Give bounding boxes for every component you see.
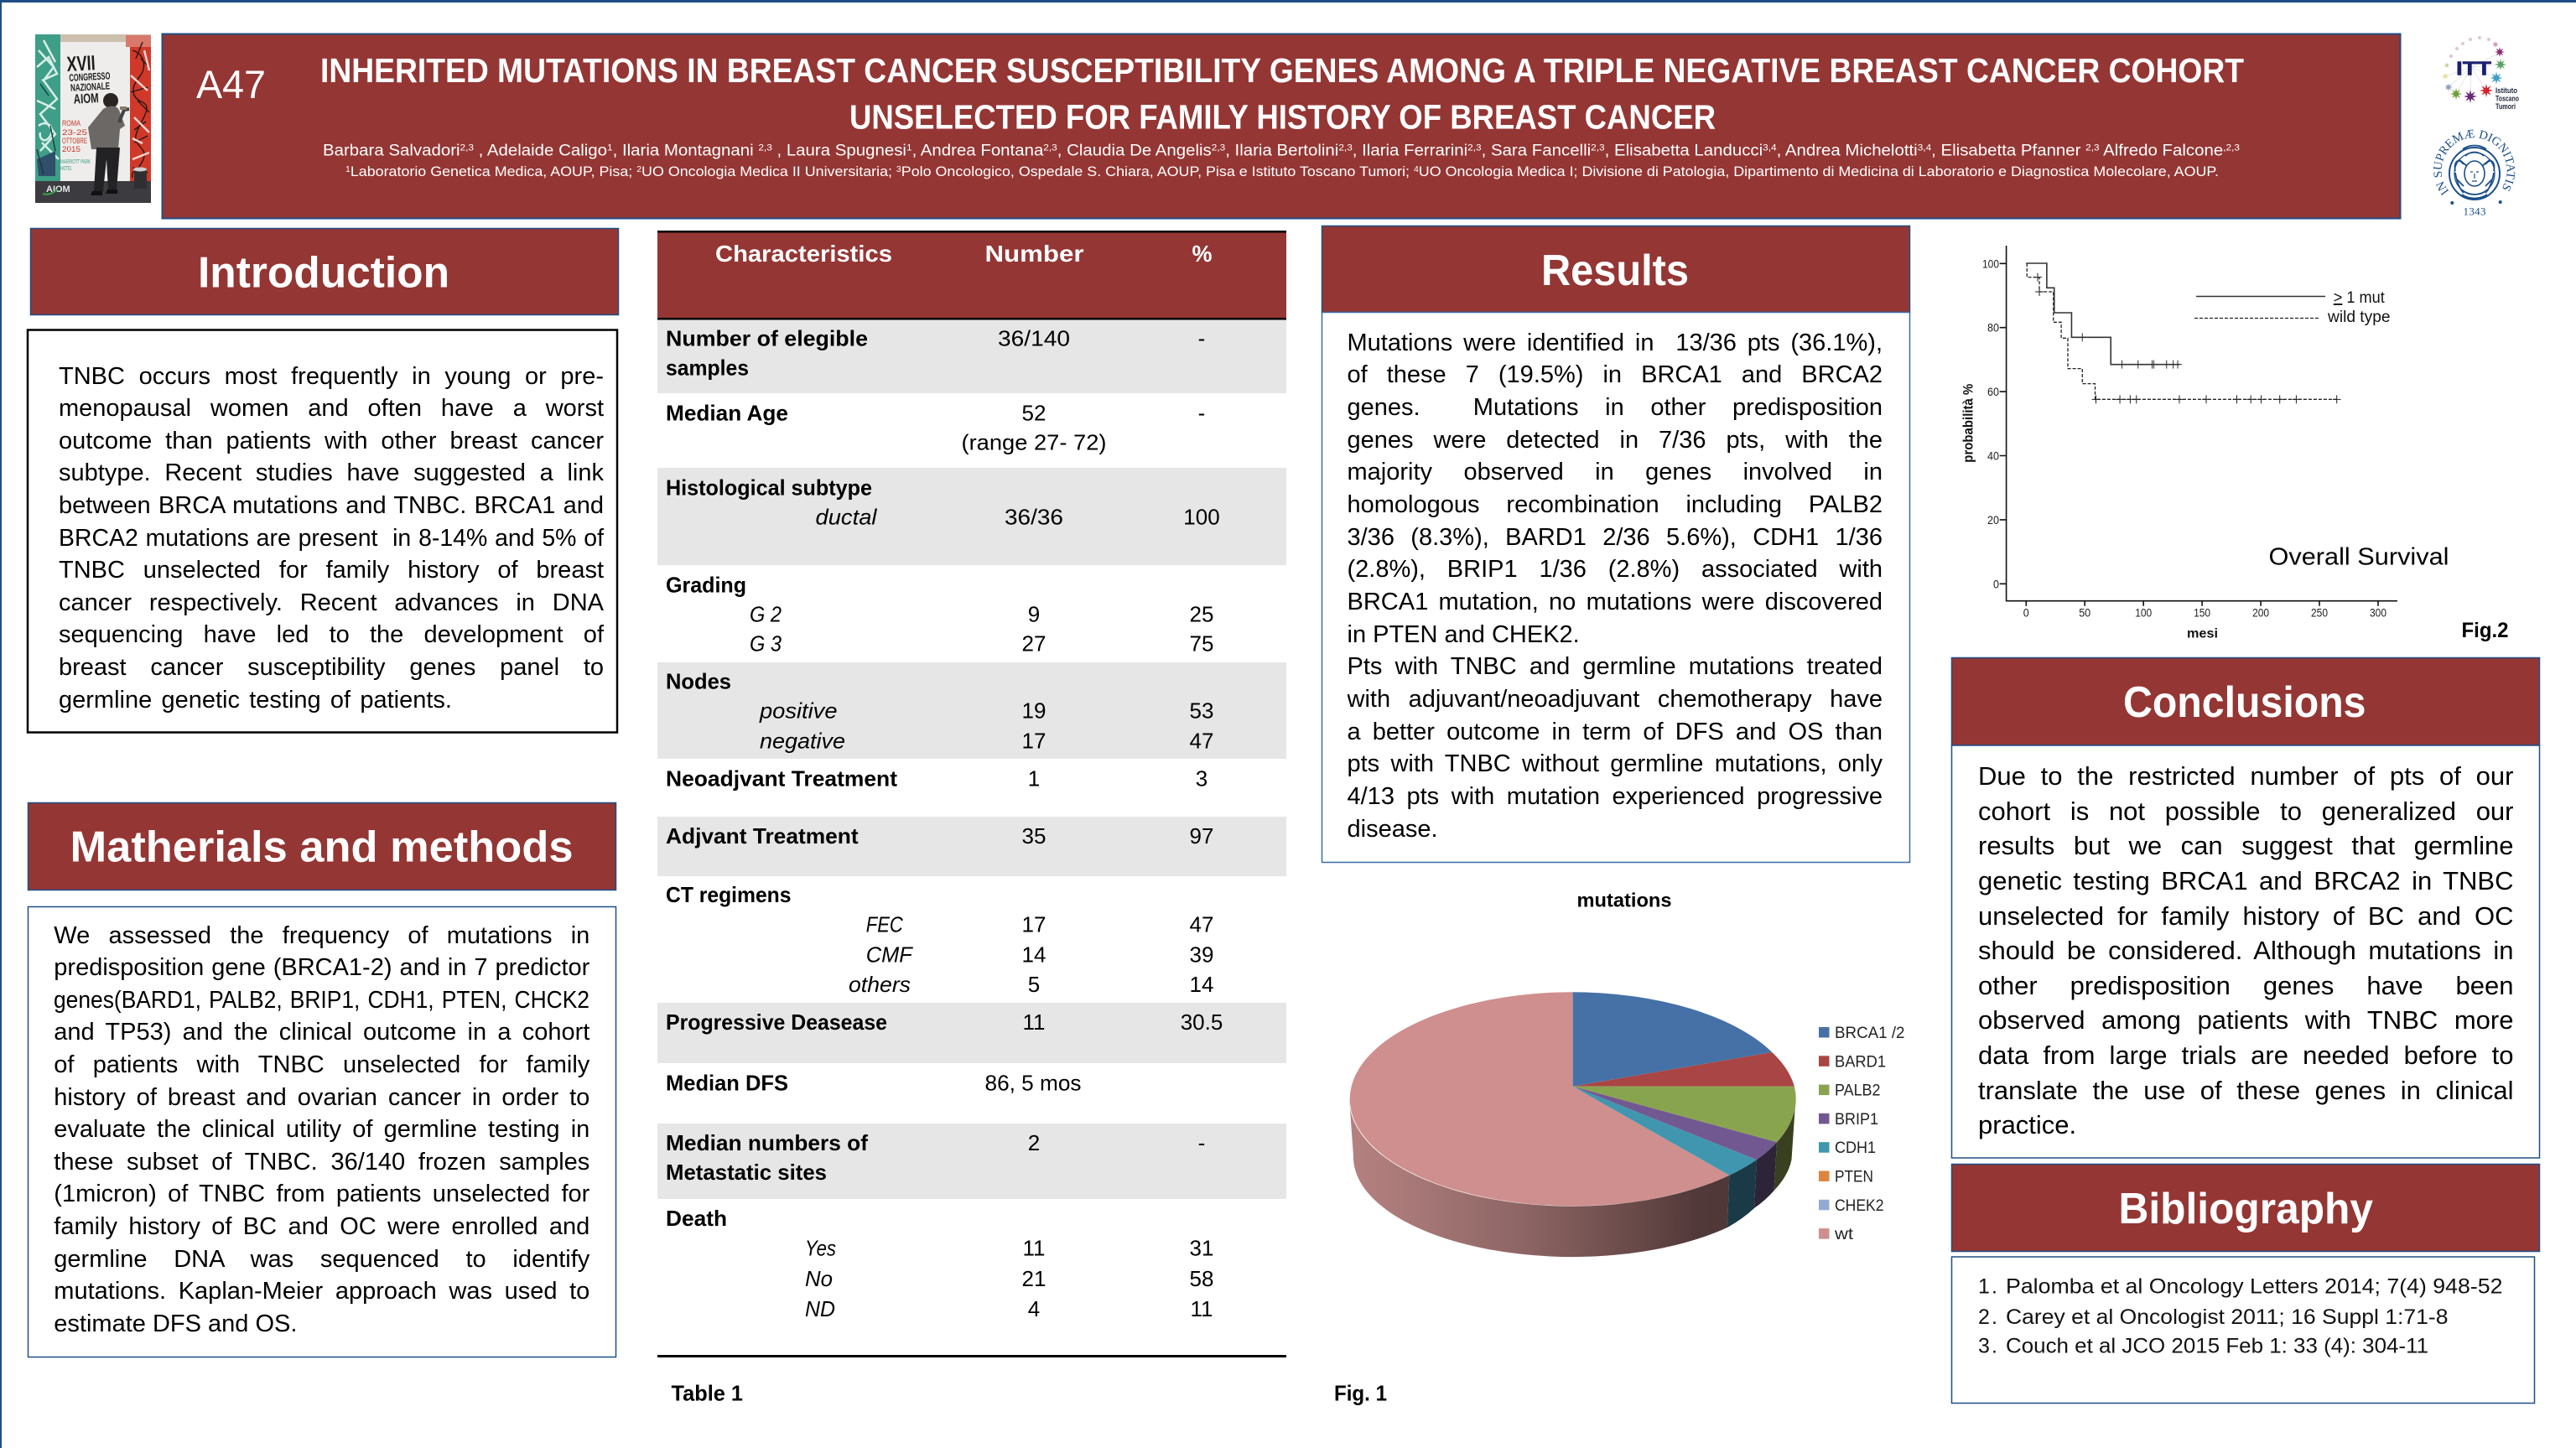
row: grading: 27 (1022, 631, 1046, 657)
logo: University of Pisa seal: IN SUPREMÆ DIGNITATIS (2433, 129, 2516, 196)
row: nodes: positive (759, 698, 837, 724)
row: number of elegible samples: 36/140 (998, 326, 1070, 351)
table header (657, 231, 1286, 320)
affiliations: Polo Oncologico, Ospedale S. Chiara, AOUP, Pisa e Istituto Toscano Tumori; (901, 163, 1414, 179)
text block: results body: genes. Mutations in other predisposition (1347, 394, 1883, 421)
text block: references: 1. (1978, 1275, 1997, 1299)
text block: introduction body: BRCA2 mutations are present in 8-14% and 5% of (59, 525, 604, 552)
title: INHERITED MUTATIONS IN BREAST CANCER SUSCEPTIBILITY GENES AMONG A TRIPLE NEGATIVE BREAST CANCER COHORT (320, 51, 2244, 90)
logo: Istituto Toscano Tumori: ITT (2456, 57, 2491, 79)
row: adjuvant treatment: 97 (1190, 823, 1213, 849)
row: grading: Grading (666, 573, 746, 598)
text block: results body (1322, 312, 1910, 862)
text block: methods body: germline DNA was sequenced to identify (54, 1246, 589, 1273)
panel: materials and methods (29, 803, 615, 1357)
authors: 2,3 (1338, 143, 1353, 153)
row: CT regimens (666, 882, 1213, 997)
text block: results body: with adjuvant/neoadjuvant chemotherapy have (1347, 686, 1883, 713)
text block: references: Couch et al JCO 2015 Feb 1: 33 (4): 304-11 (2006, 1335, 2428, 1358)
row: nodes: 19 (1022, 698, 1046, 724)
chart label: Overall Survival: Overall Survival (2269, 543, 2449, 570)
row: neoadjuvant treatment: 1 (1028, 766, 1040, 791)
text block: methods body: family history of BC and OC were enrolled and (54, 1213, 589, 1240)
text block: conclusions body: results but we can suggest that germline (1978, 831, 2514, 860)
row: death: Yes (805, 1236, 836, 1261)
poster text: congress title: XVII (66, 51, 96, 76)
x axis labels: 250 (2311, 606, 2328, 620)
heading: Bibliography: Bibliography (2118, 1185, 2373, 1233)
text block: results body: Mutations were identified in 13/36 pts (36.1%), (1347, 330, 1883, 356)
x axis labels (2023, 606, 2386, 620)
authors: 2,3 (1212, 143, 1225, 153)
chart legend: wild type (2327, 309, 2390, 326)
y axis labels: 0 (1993, 577, 1999, 590)
authors: 1 (906, 143, 912, 153)
row: death: 31 (1190, 1236, 1213, 1261)
text block: results body: Pts with TNBC and germline mutations treated (1347, 653, 1883, 680)
row: nodes: 53 (1190, 698, 1213, 724)
header banner (163, 34, 2400, 218)
row: grading: 9 (1028, 602, 1040, 627)
row: death: No (805, 1266, 833, 1291)
row: median number of metastatic sites: 2 (1028, 1130, 1040, 1155)
affiliations: Laboratorio Genetica Medica, AOUP, Pisa; (351, 163, 636, 179)
x axis labels: 150 (2194, 606, 2210, 620)
text block: conclusions body: translate the use of these genes in clinical (1978, 1076, 2514, 1105)
text block: results body: 4/13 pts with mutation experienced progressive (1347, 783, 1883, 810)
authors: , Claudia De Angelis (1057, 143, 1212, 159)
row: nodes: 17 (1022, 729, 1046, 754)
pie legend: BRCA1 /2 (1835, 1025, 1905, 1042)
text block: methods body: and TP53) and the clinical outcome in a cohort (54, 1019, 589, 1046)
poster text: date and place (60, 119, 91, 172)
text block: results body: a better outcome in term of DFS and OS than (1347, 719, 1883, 745)
text block: conclusions body: Due to the restricted number of pts of our (1978, 761, 2514, 791)
row: CT regimens: FEC (866, 912, 903, 937)
poster text: congress title: CONGRESSO (69, 70, 111, 84)
text block: conclusions body: cohort is not possible to generalized our (1978, 797, 2514, 826)
text block: methods body: genes(BARD1, PALB2, BRIP1, CDH1, PTEN, CHCK2 (54, 987, 589, 1014)
pie legend: PTEN (1835, 1169, 1873, 1186)
authors: Alfredo Falcone (2100, 143, 2223, 159)
x axis labels: 200 (2252, 606, 2269, 620)
row: death: 4 (1028, 1296, 1040, 1321)
chart: mutations pie (1349, 890, 1905, 1257)
text block: introduction body: TNBC occurs most frequently in young or pre- (59, 363, 604, 390)
row: median DFS: Median DFS (666, 1071, 788, 1096)
text block: introduction body: sequencing have led to the development of (59, 621, 604, 648)
row: grading (666, 573, 1213, 657)
row: CT regimens: CT regimens (666, 882, 792, 907)
poster text: date and place: ROMA (62, 119, 81, 128)
panel: introduction (28, 228, 619, 733)
authors: , Elisabetta Pfanner (1931, 143, 2085, 159)
row: number of elegible samples (666, 326, 1205, 381)
abstract code: A47 (196, 62, 266, 106)
title (320, 51, 2244, 136)
row: nodes: Nodes (666, 669, 731, 694)
authors: 2,3 (1467, 143, 1482, 153)
row: progressive disease: 30.5 (1181, 1009, 1223, 1035)
poster text: congress title: NAZIONALE (70, 80, 110, 94)
text block: introduction body: cancer respectively. Recent advances in DNA (59, 589, 604, 616)
text block: references: Palomba et al Oncology Letters 2014; 7(4) 948-52 (2006, 1275, 2502, 1299)
text block: results body: homologous recombination including PALB2 (1347, 491, 1883, 518)
x axis labels: 0 (2023, 606, 2029, 620)
text block: introduction body: germline genetic testing of patients. (59, 687, 452, 714)
authors: , Laura Spugnesi (772, 143, 906, 159)
authors: , Adelaide Caligo (474, 143, 607, 159)
authors: 1 (607, 143, 613, 153)
text block: results body: disease. (1347, 816, 1438, 843)
row: CT regimens: 17 (1022, 912, 1046, 937)
text block: results body: pts with TNBC without germline mutations, only (1347, 750, 1883, 777)
text block: introduction body: between BRCA mutations and TNBC. BRCA1 and (59, 492, 604, 519)
row: median age: (range 27- 72) (961, 430, 1107, 455)
heading: Results (1322, 226, 1910, 312)
pie legend (1819, 1025, 1905, 1243)
pie legend: BARD1 (1835, 1053, 1886, 1071)
heading: Bibliography (1952, 1164, 2539, 1251)
row: progressive disease: Progressive Deasease (666, 1009, 887, 1035)
row: death (666, 1206, 1213, 1321)
row: neoadjuvant treatment: Neoadjvant Treatment (666, 766, 897, 791)
table 1: patient characteristics (657, 231, 1286, 1357)
chart legend (2194, 289, 2390, 326)
y axis labels: 100 (1982, 257, 1999, 270)
authors: , Elisabetta Landucci (1605, 143, 1763, 159)
authors: , Andrea Michelotti (1777, 143, 1918, 159)
text block: conclusions body: observed among patients with TNBC more (1978, 1005, 2514, 1035)
authors: 3,4 (1763, 143, 1777, 153)
x axis labels: 300 (2370, 606, 2386, 620)
text block: references: 2. (1978, 1305, 1997, 1329)
text block: methods body: estimate DFS and OS. (54, 1310, 297, 1337)
chart title: mutations (1576, 890, 1672, 911)
row: grading: G 3 (750, 631, 782, 657)
row: CT regimens: 14 (1022, 942, 1046, 968)
pie legend: BRIP1 (1835, 1111, 1878, 1129)
poster text: congress title (67, 55, 111, 104)
row: median age: - (1198, 401, 1205, 426)
panel: results (1322, 226, 1910, 862)
text block: methods body: We assessed the frequency of mutations in (54, 922, 589, 949)
row: median age: 52 (1022, 401, 1046, 426)
row: adjuvant treatment: Adjvant Treatment (666, 823, 859, 849)
text block: references: 3. (1978, 1335, 1997, 1358)
row: grading: 25 (1190, 602, 1213, 627)
text block: conclusions body: data from large trials are needed before to (1978, 1041, 2514, 1070)
heading: Introduction (30, 228, 619, 315)
axes (2000, 246, 2397, 606)
text block: introduction body: TNBC unselected for family history of breast (59, 557, 604, 584)
text block: results body: genes were detected in 7/36 pts, with the (1347, 427, 1883, 454)
heading: Matherials and methods: Matherials and methods (70, 823, 574, 872)
row: CT regimens: others (849, 972, 911, 997)
poster text: date and place: MARRIOTT PARK (60, 159, 91, 165)
row: progressive disease (666, 1009, 1223, 1035)
text block: methods body: history of breast and ovarian cancer in order to (54, 1084, 589, 1111)
authors: , Ilaria Bertolini (1225, 143, 1338, 159)
y axis labels: 20 (1987, 513, 1999, 527)
authors: , Ilaria Montagnani (613, 143, 758, 159)
authors: ,2,3 (2223, 143, 2240, 153)
authors: , Sara Fancelli (1482, 143, 1591, 159)
text block: conclusions body: should be considered. Although mutations in (1978, 936, 2514, 965)
row: median number of metastatic sites: Median numbers of (666, 1130, 868, 1155)
text block: results body: BRCA1 mutation, no mutations were discovered (1347, 589, 1883, 615)
row: grading: G 2 (750, 602, 782, 627)
row: median age: Median Age (666, 401, 788, 426)
text block: introduction body: outcome than patients with other breast cancer (59, 428, 604, 454)
row: median number of metastatic sites: Metastatic sites (666, 1160, 827, 1185)
row: histological subtype: 36/36 (1005, 505, 1063, 530)
caption: Table 1: Table 1 (671, 1381, 743, 1406)
row: nodes: negative (760, 729, 845, 754)
row: median age (666, 401, 1205, 455)
heading: Introduction: Introduction (198, 248, 449, 297)
row: CT regimens: 14 (1190, 972, 1213, 997)
poster text: congress title: AIOM (73, 91, 99, 107)
row: progressive disease: 11 (1023, 1009, 1045, 1035)
survival curve: one or more mutations (2026, 263, 2182, 369)
authors: 2,3 (758, 143, 772, 153)
text block: methods body: of patients with TNBC unselected for family (54, 1051, 589, 1078)
panel: conclusions (1952, 657, 2539, 1158)
row: neoadjuvant treatment: 3 (1196, 766, 1208, 791)
row: number of elegible samples: Number of elegible (666, 326, 868, 351)
poster text: date and place: 23-25 (62, 128, 87, 138)
text block: results body: (2.8%), BRIP1 1/36 (2.8%) associated with (1347, 556, 1883, 583)
row: CT regimens: 5 (1028, 972, 1040, 997)
authors: 2,3 (1591, 143, 1605, 153)
pie legend: CDH1 (1835, 1139, 1876, 1157)
affiliations: 1 (345, 165, 351, 174)
text block: introduction body: subtype. Recent studies have suggested a link (59, 459, 604, 486)
row: CT regimens: 39 (1190, 942, 1213, 968)
text block: results body: 3/36 (8.3%), BARD1 2/36 5.6%), CDH1 1/36 (1347, 524, 1883, 551)
table header: % (1192, 241, 1213, 267)
row: CT regimens: CMF (866, 942, 914, 968)
row: death: ND (805, 1296, 835, 1321)
text block: conclusions body: other predisposition genes have been (1978, 971, 2514, 1000)
text block: methods body (29, 907, 615, 1357)
chart legend: > 1 mut (2334, 289, 2385, 307)
text block: references (1952, 1257, 2534, 1404)
y axis labels: 80 (1987, 321, 1999, 335)
authors: 2,3 (1043, 143, 1057, 153)
row: adjuvant treatment (666, 823, 1213, 849)
text block: results body: in PTEN and CHEK2. (1347, 621, 1580, 648)
pie legend: PALB2 (1835, 1082, 1880, 1100)
row: median number of metastatic sites (666, 1130, 1205, 1185)
logo: Istituto Toscano Tumori: Tumori (2496, 102, 2516, 112)
caption: Fig.2: Fig.2 (2462, 619, 2509, 642)
affiliations: UO Oncologia Medica I; Divisione di Patologia, Dipartimento di Medicina di Laboratorio e Diagnostica Molecolare, AOUP. (1419, 163, 2219, 179)
text block: results body: majority observed in genes involved in (1347, 459, 1883, 485)
authors: 3,4 (1918, 143, 1931, 153)
affiliations: UO Oncologia Medica II Universitaria; (641, 163, 896, 179)
row: neoadjuvant treatment (666, 766, 1208, 791)
authors: , Ilaria Ferrarini (1353, 143, 1467, 159)
text block: introduction body: breast cancer susceptibility genes panel to (59, 654, 604, 681)
logo: University of Pisa seal: 1343 (2464, 205, 2485, 218)
row: median DFS (666, 1071, 1082, 1096)
pie side wall (1349, 1098, 1795, 1257)
logo: Istituto Toscano Tumori (2442, 36, 2519, 112)
pie legend: CHEK2 (1835, 1197, 1883, 1215)
y axis labels: 40 (1987, 449, 1999, 463)
row: death: 58 (1190, 1266, 1213, 1291)
authors: Barbara Salvadori (323, 143, 450, 159)
y axis labels (1982, 257, 1999, 590)
panel: bibliography (1952, 1164, 2539, 1404)
row: nodes (666, 669, 1213, 754)
row: number of elegible samples: - (1198, 326, 1205, 351)
image: congress poster (35, 34, 151, 203)
x axis title: mesi (2187, 627, 2218, 641)
logo: Istituto Toscano Tumori: Istituto (2496, 86, 2517, 96)
text block: conclusions body: unselected for family history of BC and OC (1978, 901, 2514, 931)
affiliations: 3 (896, 165, 901, 174)
text block: conclusions body: genetic testing BRCA1 and BRCA2 in TNBC (1978, 866, 2514, 895)
row: median number of metastatic sites: - (1198, 1130, 1205, 1155)
text block: methods body: predisposition gene (BRCA1-2) and in 7 predictor (54, 954, 589, 981)
authors: , Andrea Fontana (912, 143, 1044, 159)
heading: Conclusions: Conclusions (2123, 678, 2366, 727)
text block: conclusions body (1952, 745, 2539, 1158)
x axis labels: 100 (2135, 606, 2152, 620)
caption: Fig. 1: Fig. 1 (1334, 1381, 1387, 1406)
text block: conclusions body: practice. (1978, 1110, 2076, 1139)
title: UNSELECTED FOR FAMILY HISTORY OF BREAST CANCER (849, 97, 1716, 136)
heading: Conclusions (1952, 657, 2539, 745)
affiliations: 2 (636, 165, 642, 174)
text block: introduction body (28, 330, 617, 733)
row: histological subtype: Histological subtype (666, 475, 872, 501)
text block: methods body: these subset of TNBC. 36/140 frozen samples (54, 1149, 589, 1176)
survival curve: wild type (2027, 263, 2341, 403)
affiliations: 4 (1414, 165, 1419, 174)
y axis title: probabilità % (1961, 384, 1976, 463)
row: death: 11 (1023, 1236, 1045, 1261)
authors: 2,3 (460, 143, 474, 153)
row: adjuvant treatment: 35 (1022, 823, 1046, 849)
row: death: 21 (1022, 1266, 1046, 1291)
poster figure: painter (88, 93, 147, 195)
text block: methods body: evaluate the clinical utility of germline testing in (54, 1116, 589, 1143)
poster text: date and place: OTTOBRE (62, 137, 87, 146)
authors: 2,3 (2085, 143, 2100, 153)
poster logo: AIOM: AIOM (46, 184, 70, 195)
row: death: 11 (1191, 1296, 1213, 1321)
row: histological subtype (666, 475, 1220, 530)
row: nodes: 47 (1190, 729, 1213, 754)
heading: Results: Results (1541, 247, 1689, 295)
row: grading: 75 (1190, 631, 1213, 657)
pie top wedges (1350, 992, 1796, 1206)
row: median DFS: 86, 5 mos (984, 1071, 1082, 1096)
row: CT regimens: 47 (1190, 912, 1213, 937)
poster text: date and place: 2015 (62, 145, 80, 154)
text block: references: Carey et al Oncologist 2011; 16 Suppl 1:71-8 (2006, 1305, 2449, 1329)
x axis labels: 50 (2079, 606, 2090, 620)
heading: Matherials and methods (29, 803, 615, 890)
chart: Kaplan-Meier overall survival (1961, 246, 2449, 641)
table row backgrounds (657, 319, 1286, 1199)
text block: methods body: (1micron) of TNBC from patients unselected for (54, 1181, 589, 1207)
y axis labels: 60 (1987, 385, 1999, 398)
text block: results body: of these 7 (19.5%) in BRCA1 and BRCA2 (1347, 361, 1883, 388)
logo: Istituto Toscano Tumori: Toscano (2496, 94, 2519, 104)
row: histological subtype: 100 (1183, 505, 1220, 530)
row: death: Death (666, 1206, 727, 1231)
poster text: date and place: HOTEL (60, 166, 72, 172)
row: histological subtype: ductal (815, 505, 878, 530)
text block: methods body: mutations. Kaplan-Meier approach was used to (54, 1278, 589, 1305)
row: number of elegible samples: samples (666, 356, 749, 381)
pie legend: wt (1834, 1226, 1854, 1243)
text block: introduction body: menopausal women and often have a worst (59, 395, 604, 422)
table header: Characteristics (715, 241, 892, 267)
table header: Number (984, 241, 1084, 267)
